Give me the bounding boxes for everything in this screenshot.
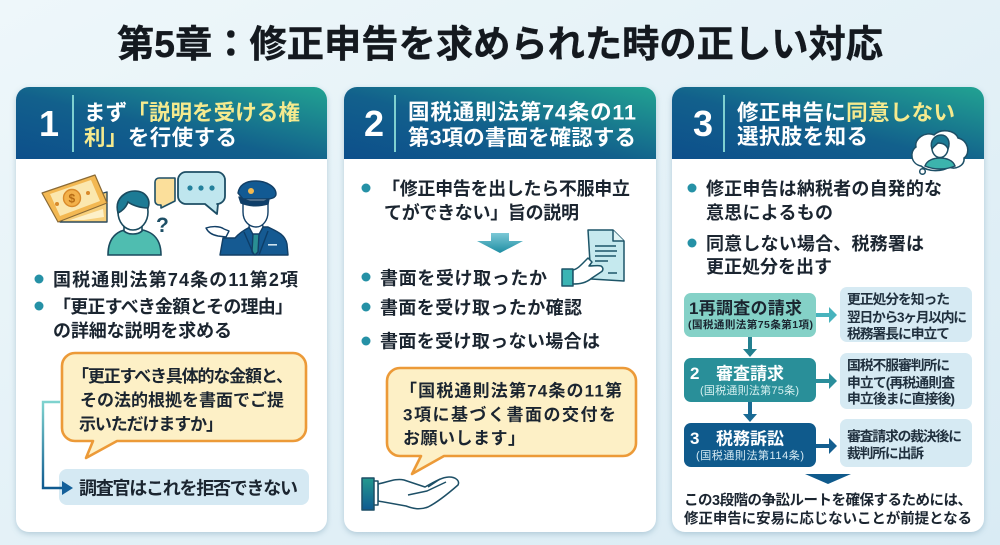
flow step: re-investigation: (国税通則法第75条第1項) <box>688 318 813 331</box>
detail: step 2: 国税不服審判所に <box>847 357 950 373</box>
flow step: re-investigation: 1再調査の請求 <box>689 298 802 318</box>
conclusion text <box>684 491 972 528</box>
panel 1 header: まず「説明を受ける権 <box>84 101 300 125</box>
icon: yellow speech bubble <box>155 178 175 208</box>
bullet list 2: 書面を受け取ったか確認 <box>380 297 582 318</box>
detail: step 3: 審査請求の裁決後に <box>847 428 962 444</box>
bullet list 1 <box>34 269 298 341</box>
panel 3 header: 修正申告に同意しない <box>737 101 955 125</box>
callout: quote 1 <box>62 353 306 458</box>
icon: blue speech bubble <box>178 172 225 214</box>
icon: hand holding document <box>562 230 624 286</box>
bullet list 2: 書面を受け取っない場合は <box>380 330 600 352</box>
conclusion text: この3段階の争訟ルートを確保するためには、 <box>684 491 972 509</box>
arrow: down to conclusion <box>805 474 851 484</box>
flow step: tax litigation <box>684 423 816 467</box>
icon: tax officer <box>206 181 288 255</box>
bullet list 3: 意思によるもの <box>706 203 833 223</box>
bullet list 2: 書面を受け取ったか <box>380 268 547 288</box>
arrow: down <box>477 233 523 253</box>
detail: step 1: 税務署長に申立て <box>847 326 950 342</box>
panel 1 header: 1 <box>39 103 59 144</box>
icon: money bills: $ <box>68 192 76 206</box>
callout: quote 1: その法的根拠を書面でご提 <box>80 390 284 410</box>
icon: thought cloud <box>912 131 968 174</box>
bullet list 3 <box>688 179 942 277</box>
flow step: examination request: (国税通則法第75条) <box>700 383 799 397</box>
panel 3 header: 3 <box>693 103 713 144</box>
arrow: step 1 right <box>816 307 837 323</box>
panel 1 header <box>16 87 327 159</box>
bullet list 1: 「更正すべき金額とその理由」 <box>53 297 293 317</box>
callout: quote 2: お願いします」 <box>403 429 525 448</box>
panel 2 header: 2 <box>364 103 384 144</box>
arrow: step 2 right <box>816 373 837 389</box>
bullet list 1: 国税通則法第74条の11第2項 <box>53 269 298 290</box>
panel: step 3 <box>672 87 984 532</box>
flow step: examination request: 審査請求 <box>716 364 784 384</box>
icon: question mark: ? <box>156 214 169 237</box>
arrow: step 1 down <box>743 337 757 357</box>
panel 3 card <box>672 87 984 532</box>
detail: step 2: 申立て(再税通則査 <box>847 374 955 390</box>
panel 3 header: 選択肢を知る <box>737 125 868 149</box>
arrow: step 3 right <box>816 438 837 454</box>
flow step: examination request: 2 <box>690 364 699 383</box>
conclusion text: 修正申告に安易に応じないことが前提となる <box>684 510 972 528</box>
bullet list 1: の詳細な説明を求める <box>53 320 232 341</box>
detail: step 1: 翌日から3ヶ月以内に <box>847 309 967 325</box>
callout: quote 2: 「国税通則法第74条の11第 <box>400 380 622 400</box>
bullet list 3: 同意しない場合、税務署は <box>706 234 924 254</box>
detail: step 1 <box>840 287 972 342</box>
detail: step 1: 更正処分を知った <box>847 292 950 307</box>
detail: step 2 <box>840 353 972 409</box>
flow step: tax litigation: 3 <box>690 429 699 448</box>
icon: taxpayer <box>108 191 161 255</box>
bullet list 3: 更正処分を出す <box>706 257 832 277</box>
flow step: examination request <box>684 358 816 402</box>
panel: step 2 <box>344 87 656 532</box>
note: cannot refuse: 調査官はこれを拒否できない <box>79 478 298 498</box>
panel 2 header: 第3項の書面を確認する <box>408 126 636 150</box>
bullet: explanation: 「修正申告を出したら不服申立 <box>382 179 630 199</box>
bullet list 2 <box>362 268 600 352</box>
panel 1 header: 利」を行使する <box>84 126 237 150</box>
callout: quote 1: 示いただけますか」 <box>79 415 223 434</box>
panel 2 header <box>344 87 656 159</box>
panel 3 header <box>672 87 984 159</box>
flow step: tax litigation: 税務訴訟 <box>716 430 784 448</box>
callout: quote 2 <box>387 368 636 474</box>
flow step: re-investigation <box>684 293 816 337</box>
callout: quote 2: 3項に基づく書面の交付を <box>403 404 616 424</box>
title: 第5章：修正申告を求められた時の正しい対応 <box>117 23 883 65</box>
panel: step 1 <box>16 87 327 532</box>
arrow: to refusal note <box>43 402 73 495</box>
panel 1 card <box>16 87 327 532</box>
bullet: explanation: てができない」旨の説明 <box>384 202 579 223</box>
bullet: explanation <box>362 179 630 223</box>
detail: step 3 <box>840 419 972 467</box>
panel 2 card <box>344 87 656 532</box>
callout: quote 1: 「更正すべき具体的な金額と、 <box>72 366 293 386</box>
note: cannot refuse <box>59 469 309 505</box>
detail: step 3: 裁判所に出訴 <box>847 445 924 461</box>
icon: money bills <box>42 175 107 222</box>
detail: step 2: 申立後まに直接後) <box>847 390 955 406</box>
flow step: tax litigation: (国税通則法第114条) <box>696 448 804 462</box>
icon: open hand <box>362 477 459 510</box>
panel 2 header: 国税通則法第74条の11 <box>408 100 636 124</box>
bullet list 3: 修正申告は納税者の自発的な <box>706 179 942 199</box>
arrow: step 2 down <box>743 402 757 422</box>
